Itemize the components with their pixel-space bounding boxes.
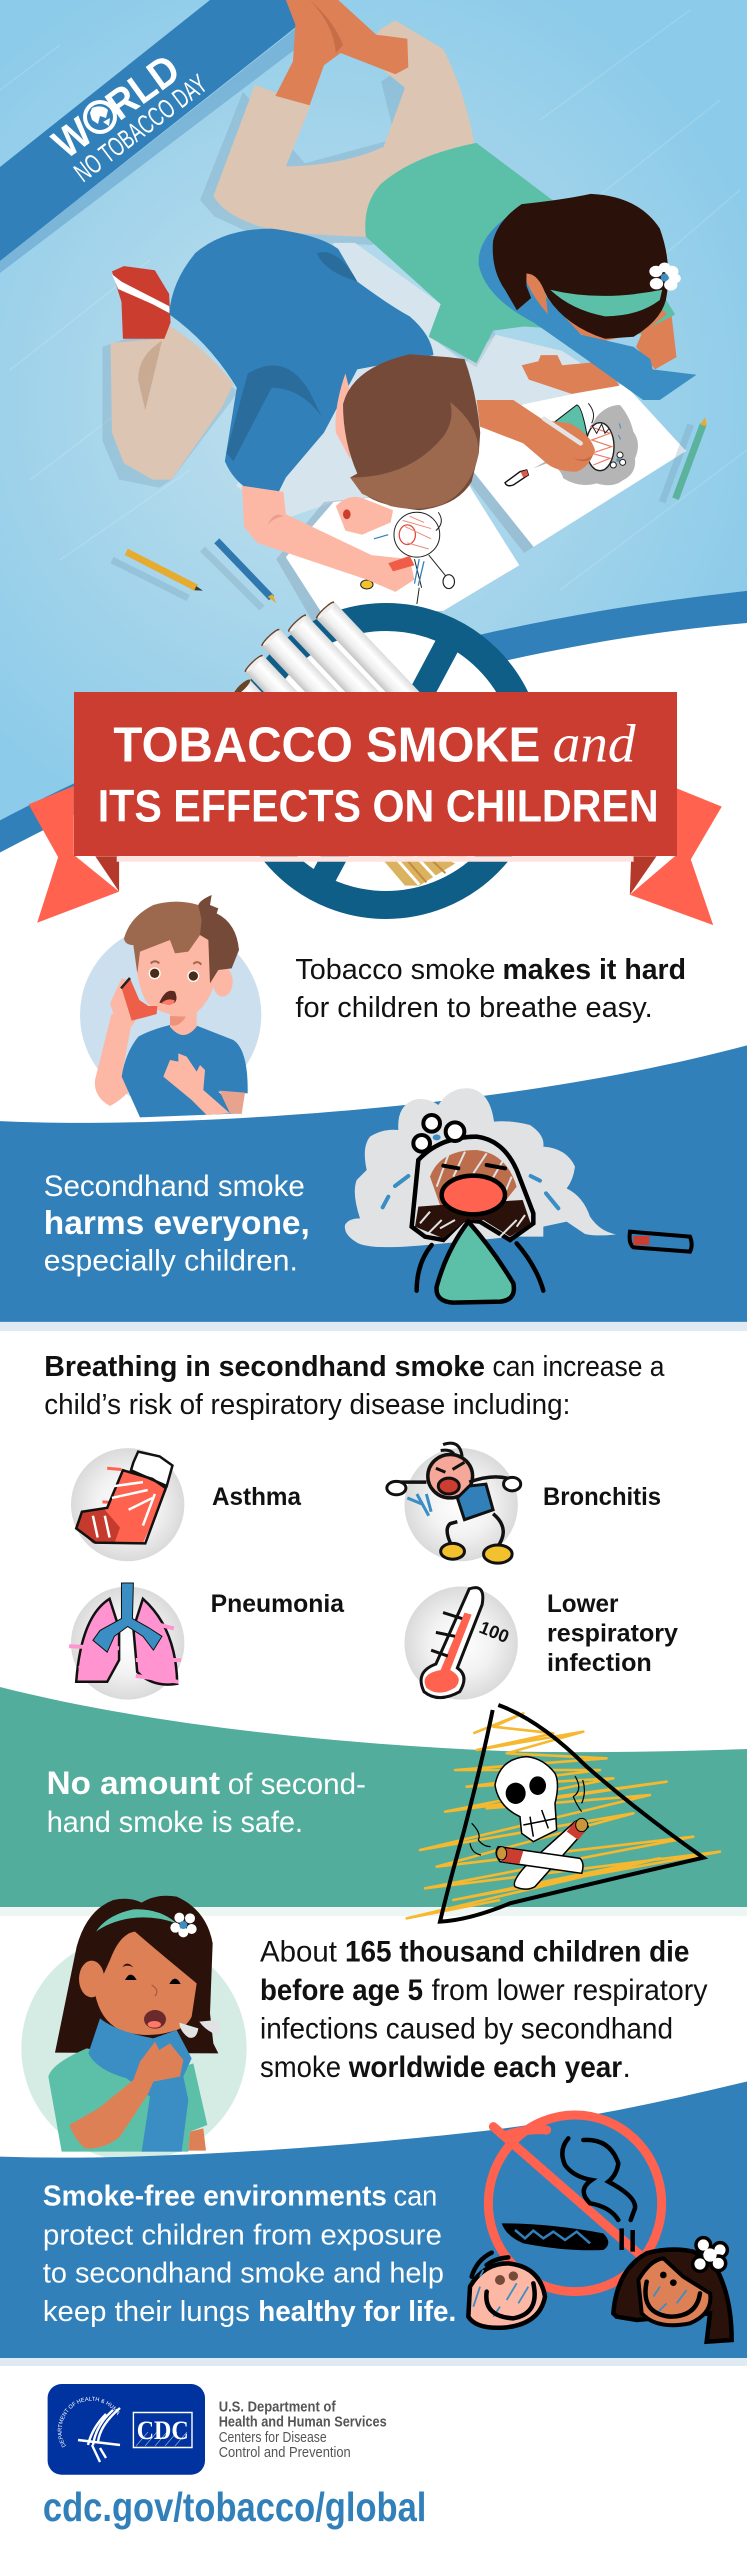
text: can: [394, 2181, 437, 2213]
boy with inhaler: [80, 895, 261, 1117]
text: breathing in secondhand smoke: Breathing in secondhand smoke: [44, 1351, 485, 1383]
pencil: green: [662, 417, 707, 502]
text: protect children from exposure: [43, 2220, 442, 2252]
background: sky blue floor: [0, 0, 747, 900]
banner: World No Tobacco Day: [0, 0, 330, 273]
cigarette butt: [630, 1232, 692, 1252]
text: hand smoke is safe.: [47, 1806, 303, 1839]
light shadow area behind papers: [236, 243, 619, 518]
labels: disease names: Pneumonia: [211, 1590, 345, 1618]
icon: asthma inhaler: [71, 1448, 184, 1561]
boy: arm, hand, crayon: [242, 486, 414, 592]
hand and inhaler: [110, 978, 140, 1027]
icon: thermometer: [404, 1587, 518, 1700]
neck and head: [170, 1012, 197, 1035]
text: Secondhand smoke: [44, 1170, 305, 1203]
agency name text: Control and Prevention: [219, 2445, 351, 2461]
prohibition wheel with cigarettes: [232, 600, 530, 905]
labels: disease names: Lower: [547, 1590, 619, 1618]
text: Smoke-free environments: [43, 2181, 387, 2213]
girl drawing on paper and her arm: [477, 400, 638, 486]
text: No amount: [47, 1765, 220, 1801]
title ribbon: [29, 692, 722, 925]
text: to secondhand smoke and help: [43, 2257, 444, 2289]
boy: head and hair: [335, 354, 480, 510]
hair: [198, 895, 239, 983]
icon: bronchitis coughing child: [387, 1443, 521, 1563]
paper left: [276, 486, 519, 624]
pencil: blue: [202, 541, 276, 608]
cigarette filters: [379, 855, 469, 886]
text: makes it hard to breathe: [295, 954, 686, 1024]
text: [43, 2181, 456, 2328]
text: 165 thousand children die: before age 5: [260, 1974, 423, 2007]
labels: disease names: respiratory: [547, 1620, 678, 1648]
text: 165 thousand children die: 165 thousand children die: [345, 1936, 689, 1969]
swoosh and white page: [0, 591, 747, 2560]
title text: and: [553, 714, 637, 774]
text: 165 thousand children die: worldwide each year: [348, 2051, 623, 2084]
icon: globe: [83, 100, 117, 134]
ribbon tails: [29, 786, 722, 925]
text: 165 thousand children die: [260, 1936, 708, 2084]
banner: World No Tobacco Day: WORLD: [44, 45, 188, 167]
icon: no smoking sign with happy children: [468, 2115, 732, 2342]
panel: secondhand smoke harms everyone: [0, 1045, 747, 1331]
agency name text: U.S. Department of: [219, 2400, 336, 2416]
HHS seal: DEPARTMENT OF HEALTH & HUMAN SERVICES USA: [58, 2396, 120, 2448]
agency name text: Health and Human Services: [219, 2415, 387, 2431]
text: makes it hard to breathe: makes it hard: [502, 954, 686, 986]
happy boy head: [468, 2253, 545, 2328]
logo: HHS and CDC: [48, 2384, 205, 2475]
text: [47, 1765, 366, 1839]
boy: legs, sock, shirt: [102, 229, 434, 492]
icon: lungs pneumonia: [69, 1583, 184, 1700]
banner: World No Tobacco Day: NO TOBACCO DAY: [69, 69, 213, 188]
girl legs: [200, 0, 476, 245]
text: breathing in secondhand smoke: child’s risk of respiratory disease including:: [44, 1389, 570, 1421]
CDC box: CDC: [137, 2416, 189, 2445]
text: 165 thousand children die: .: [622, 2051, 631, 2084]
text: harms everyone,: [44, 1204, 310, 1241]
labels: disease names: [211, 1483, 678, 1677]
title text: TOBACCO SMOKE: [113, 718, 540, 772]
text: makes it hard to breathe: for children to breathe easy.: [295, 992, 653, 1024]
labels: disease names: Asthma: [212, 1483, 302, 1511]
agency name text: [219, 2400, 387, 2461]
panel: no amount is safe: [0, 1687, 747, 1916]
panel: smoke-free environments: [0, 2082, 747, 2366]
disease icons: [69, 1443, 521, 1700]
face: [149, 967, 161, 979]
illustration: girl coughing: [21, 1896, 247, 2161]
agency name text: Centers for Disease: [219, 2430, 327, 2446]
cigarettes: [232, 600, 426, 724]
text: especially children.: [44, 1244, 298, 1278]
text: breathing in secondhand smoke: can increase a: [492, 1351, 665, 1383]
labels: disease names: infection: [547, 1649, 652, 1677]
girl: scarf, arm, shirt, hair: [365, 143, 696, 400]
website URL: cdc.gov/tobacco/global: [43, 2484, 426, 2530]
illustration: children drawing on the floor: [102, 0, 707, 624]
text: healthy for life.: [258, 2296, 456, 2328]
boy drawing on paper: [361, 512, 454, 604]
labels: disease names: Bronchitis: [543, 1483, 661, 1511]
text: 165 thousand children die: smoke: [260, 2051, 341, 2084]
text: makes it hard to breathe: Tobacco smoke: [295, 954, 495, 986]
icon: child coughing in smoke cloud: [345, 1088, 692, 1303]
text: of second-: [228, 1768, 366, 1801]
text: 165 thousand children die: infections caused by secondhand: [260, 2012, 673, 2046]
happy girl head: [613, 2238, 732, 2342]
text: 165 thousand children die: from lower respiratory: [432, 1974, 708, 2007]
hand on chest: [163, 1053, 230, 1115]
text: [44, 1170, 310, 1278]
title text: ITS EFFECTS ON CHILDREN: [98, 780, 659, 832]
thermometer 100 label: 100: [477, 1617, 512, 1647]
arm holding inhaler: [95, 1013, 132, 1106]
pencil: yellow: [112, 552, 203, 598]
text: keep their lungs: [43, 2296, 250, 2328]
text: 165 thousand children die: About: [260, 1936, 338, 1969]
shirt: [122, 1025, 248, 1117]
text: breathing in secondhand smoke: [44, 1351, 665, 1421]
HHS seal: [58, 2396, 121, 2462]
icon: warning triangle with skull: [407, 1705, 720, 1922]
paper right: [462, 384, 686, 553]
title text: [98, 714, 659, 832]
